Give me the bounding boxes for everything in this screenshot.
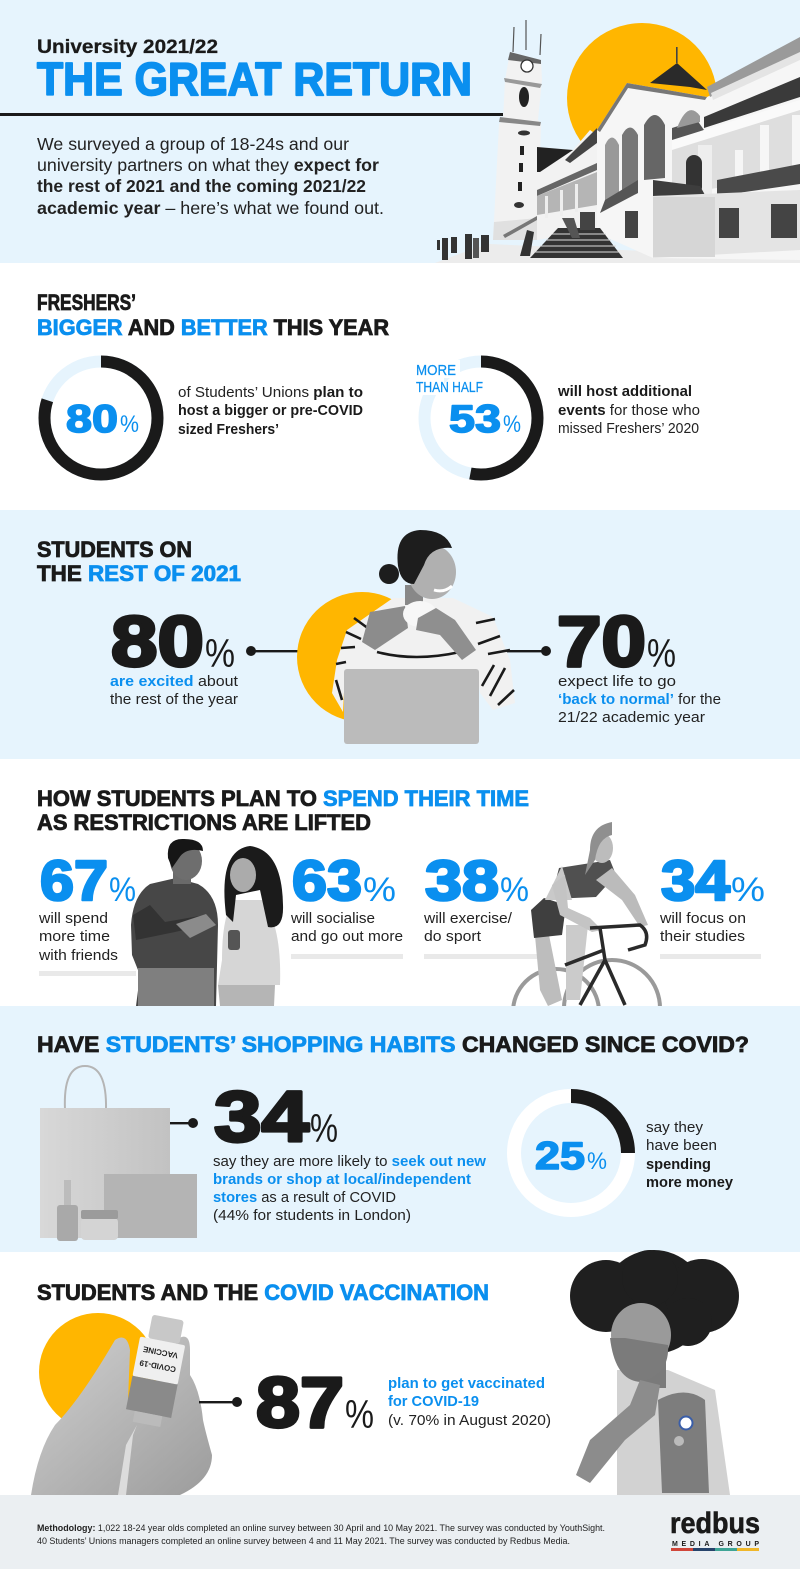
stat: 67% friends: %: [109, 871, 136, 909]
text: 53% additional events: missed Freshers’ 2020: [558, 420, 699, 437]
heading: rest of 2021: [37, 537, 241, 586]
heading: vaccination: STUDENTS AND THE COVID VACCINATION: [37, 1280, 489, 1305]
text: spending more: say they: [646, 1119, 703, 1136]
stat: 38% exercise: do sport: [424, 928, 482, 945]
chart: 53% donut: THAN HALF: [416, 379, 483, 396]
text: 53% additional events: events for those who: [558, 402, 700, 419]
stat: 80% excited: [110, 603, 239, 708]
stat: 34% studies: 34: [661, 849, 730, 913]
text: 80% of unions: sized Freshers’: [178, 421, 279, 438]
panel: footer: [0, 1495, 800, 1569]
chart: 80% donut: 80: [66, 398, 118, 441]
connector: right: [490, 646, 551, 656]
title: THE GREAT RETURN: [37, 53, 472, 105]
stat: 70% normal: %: [647, 632, 676, 676]
panel: header: [0, 0, 800, 263]
stat: 80% excited: %: [205, 632, 235, 676]
stat: 70% normal: 21/22 academic year: [558, 709, 705, 726]
stat: 34% local brands: brands or shop at local/independent: [213, 1171, 471, 1188]
stat: 63% socialise: %: [363, 871, 396, 909]
chart: 53% donut: MORE: [416, 362, 456, 379]
panel: freshers: [0, 263, 800, 510]
title rule: [0, 113, 503, 116]
heading: freshers: [37, 290, 389, 340]
logo: redbus media group: [670, 1507, 760, 1551]
stat: 34% local brands: [213, 1078, 486, 1224]
chart: 80% donut: [44, 362, 158, 474]
heading: freshers: BIGGER AND BETTER THIS YEAR: [37, 315, 389, 340]
illustration: cyclist: [513, 822, 660, 1056]
stat: 34% local brands: 34: [214, 1078, 310, 1157]
heading: spend their time: [37, 786, 529, 835]
text: 80% of unions: of Students’ Unions plan to: [178, 384, 363, 401]
stat: 67% friends: will spend: [38, 910, 108, 927]
heading: freshers: FRESHERS’: [37, 290, 136, 315]
text: 80% of unions: host a bigger or pre-COVID: [178, 402, 363, 419]
heading: rest of 2021: STUDENTS ON: [37, 537, 192, 562]
stat: 80% excited: are excited about: [110, 673, 239, 690]
connector: left: [246, 646, 301, 656]
stat: 70% normal: ‘back to normal’ for the: [558, 691, 721, 708]
illustration: student with laptop: [332, 530, 515, 744]
stairs: [520, 212, 623, 258]
panel: rest of 2021: [0, 510, 800, 759]
stat: 34% local brands: say they are more likely to seek out new: [213, 1153, 486, 1170]
illustration: gloved hand with vaccine vial: COVID-19: [138, 1358, 177, 1374]
text: 53% additional events: will host additional: [557, 383, 692, 400]
icon: yellow circle: [297, 592, 427, 722]
chart: 25% donut: [514, 1096, 628, 1210]
stat: 87% vaccinated: %: [345, 1393, 374, 1437]
illustration: shopping bag and products: [40, 1066, 197, 1241]
chart: 25% donut: %: [587, 1148, 607, 1175]
stat: 34% studies: will focus on: [659, 910, 746, 927]
stat: 67% friends: [38, 849, 136, 976]
illustration: woman with vaccination sticker: [570, 1250, 739, 1495]
stat: 34% studies: [659, 849, 765, 959]
connector: bag: [170, 1118, 198, 1128]
panel: vaccination: [0, 1250, 800, 1495]
heading: shopping habits: HAVE STUDENTS’ SHOPPING HABITS CHANGED SINCE COVID?: [37, 1032, 749, 1057]
chart: 80% donut: %: [120, 411, 139, 438]
text: spending more: have been: [646, 1137, 717, 1154]
chart: 25% donut: 25: [535, 1135, 585, 1178]
stat: 38% exercise: %: [500, 871, 529, 909]
stat: 80% excited: 80: [111, 603, 204, 682]
icon: yellow sun: [567, 23, 717, 173]
stat: 38% exercise: 38: [425, 849, 499, 913]
stat: 87% vaccinated: [256, 1364, 551, 1443]
stat: 63% socialise: 63: [292, 849, 362, 913]
text: spending more: spending: [646, 1156, 711, 1173]
stat: 34% local brands: (44% for students in London): [213, 1207, 411, 1224]
intro text: university partners on what they expect for: [37, 155, 379, 175]
chart: 53% donut: 53: [449, 398, 501, 441]
stat: 87% vaccinated: for COVID-19: [388, 1393, 479, 1410]
illustration: two friends: [131, 839, 283, 1006]
text: methodology: 40 Students’ Unions managers completed an online survey between 4 and 11 May 2021. The survey was conducted by Redbus Media.: [37, 1536, 570, 1547]
logo: redbus media group: redbus: [670, 1507, 760, 1540]
people group: [437, 234, 489, 260]
chart: 53% donut: %: [503, 411, 521, 438]
stat: 38% exercise: will exercise/: [423, 910, 513, 927]
heading: rest of 2021: THE REST OF 2021: [37, 561, 241, 586]
stat: 87% vaccinated: (v. 70% in August 2020): [388, 1412, 551, 1429]
stat: 34% local brands: stores as a result of COVID: [213, 1189, 396, 1206]
stat: 63% socialise: and go out more: [291, 928, 403, 945]
illustration: university building: [435, 20, 800, 263]
left wing: [503, 128, 597, 240]
illustration: gloved hand with vaccine vial: VACCINE: [142, 1344, 179, 1360]
intro text: the rest of 2021 and the coming 2021/22: [37, 176, 366, 196]
stat: 80% excited: the rest of the year: [110, 691, 238, 708]
logo: redbus media group: MEDIA GROUP: [672, 1541, 759, 1548]
stat: 70% normal: expect life to go: [558, 673, 676, 690]
stat: 34% studies: %: [731, 871, 765, 909]
text: methodology: [37, 1523, 605, 1547]
eyebrow: University 2021/22: University 2021/22: [37, 37, 218, 58]
text: spending more: more money: [646, 1174, 734, 1191]
icon: yellow circle: [39, 1313, 157, 1431]
connector: vial: [199, 1397, 242, 1407]
chart: 53% donut: [414, 360, 538, 474]
man: [131, 839, 218, 1006]
laptop: [344, 669, 479, 744]
text: spending more: [646, 1119, 734, 1191]
intro text: We surveyed a group of 18-24s and our: [37, 134, 349, 154]
tower: [493, 20, 542, 240]
stat: 70% normal: [557, 603, 721, 726]
intro text: academic year – here’s what we found out.: [37, 198, 384, 218]
illustration: gloved hand with vaccine vial: [31, 1313, 212, 1495]
stat: 67% friends: 67: [40, 849, 108, 913]
panel: shopping habits: [0, 1006, 800, 1252]
stat: 34% local brands: %: [310, 1107, 338, 1151]
text: methodology: Methodology: 1,022 18-24 year olds completed an online survey between 30 April and 10 May 2021. The survey was conducted by YouthSight.: [37, 1523, 605, 1534]
stat: 67% friends: more time: [39, 928, 110, 945]
intro text: [37, 134, 384, 218]
heading: spend their time: HOW STUDENTS PLAN TO SPEND THEIR TIME: [37, 786, 529, 811]
panel: spending time: [0, 759, 800, 1056]
woman: [218, 846, 283, 1006]
stat: 38% exercise: [423, 849, 542, 959]
stat: 63% socialise: will socialise: [290, 910, 375, 927]
stat: 34% studies: their studies: [660, 928, 745, 945]
text: 53% additional events: [557, 383, 700, 437]
stat: 87% vaccinated: 87: [256, 1364, 344, 1443]
stat: 67% friends: with friends: [38, 947, 118, 964]
stat: 70% normal: 70: [557, 603, 646, 682]
main facade: [597, 37, 800, 260]
text: 80% of unions: [178, 384, 363, 438]
stat: 87% vaccinated: plan to get vaccinated: [388, 1375, 545, 1392]
heading: spend their time: AS RESTRICTIONS ARE LIFTED: [37, 810, 371, 835]
stat: 63% socialise: [290, 849, 403, 959]
